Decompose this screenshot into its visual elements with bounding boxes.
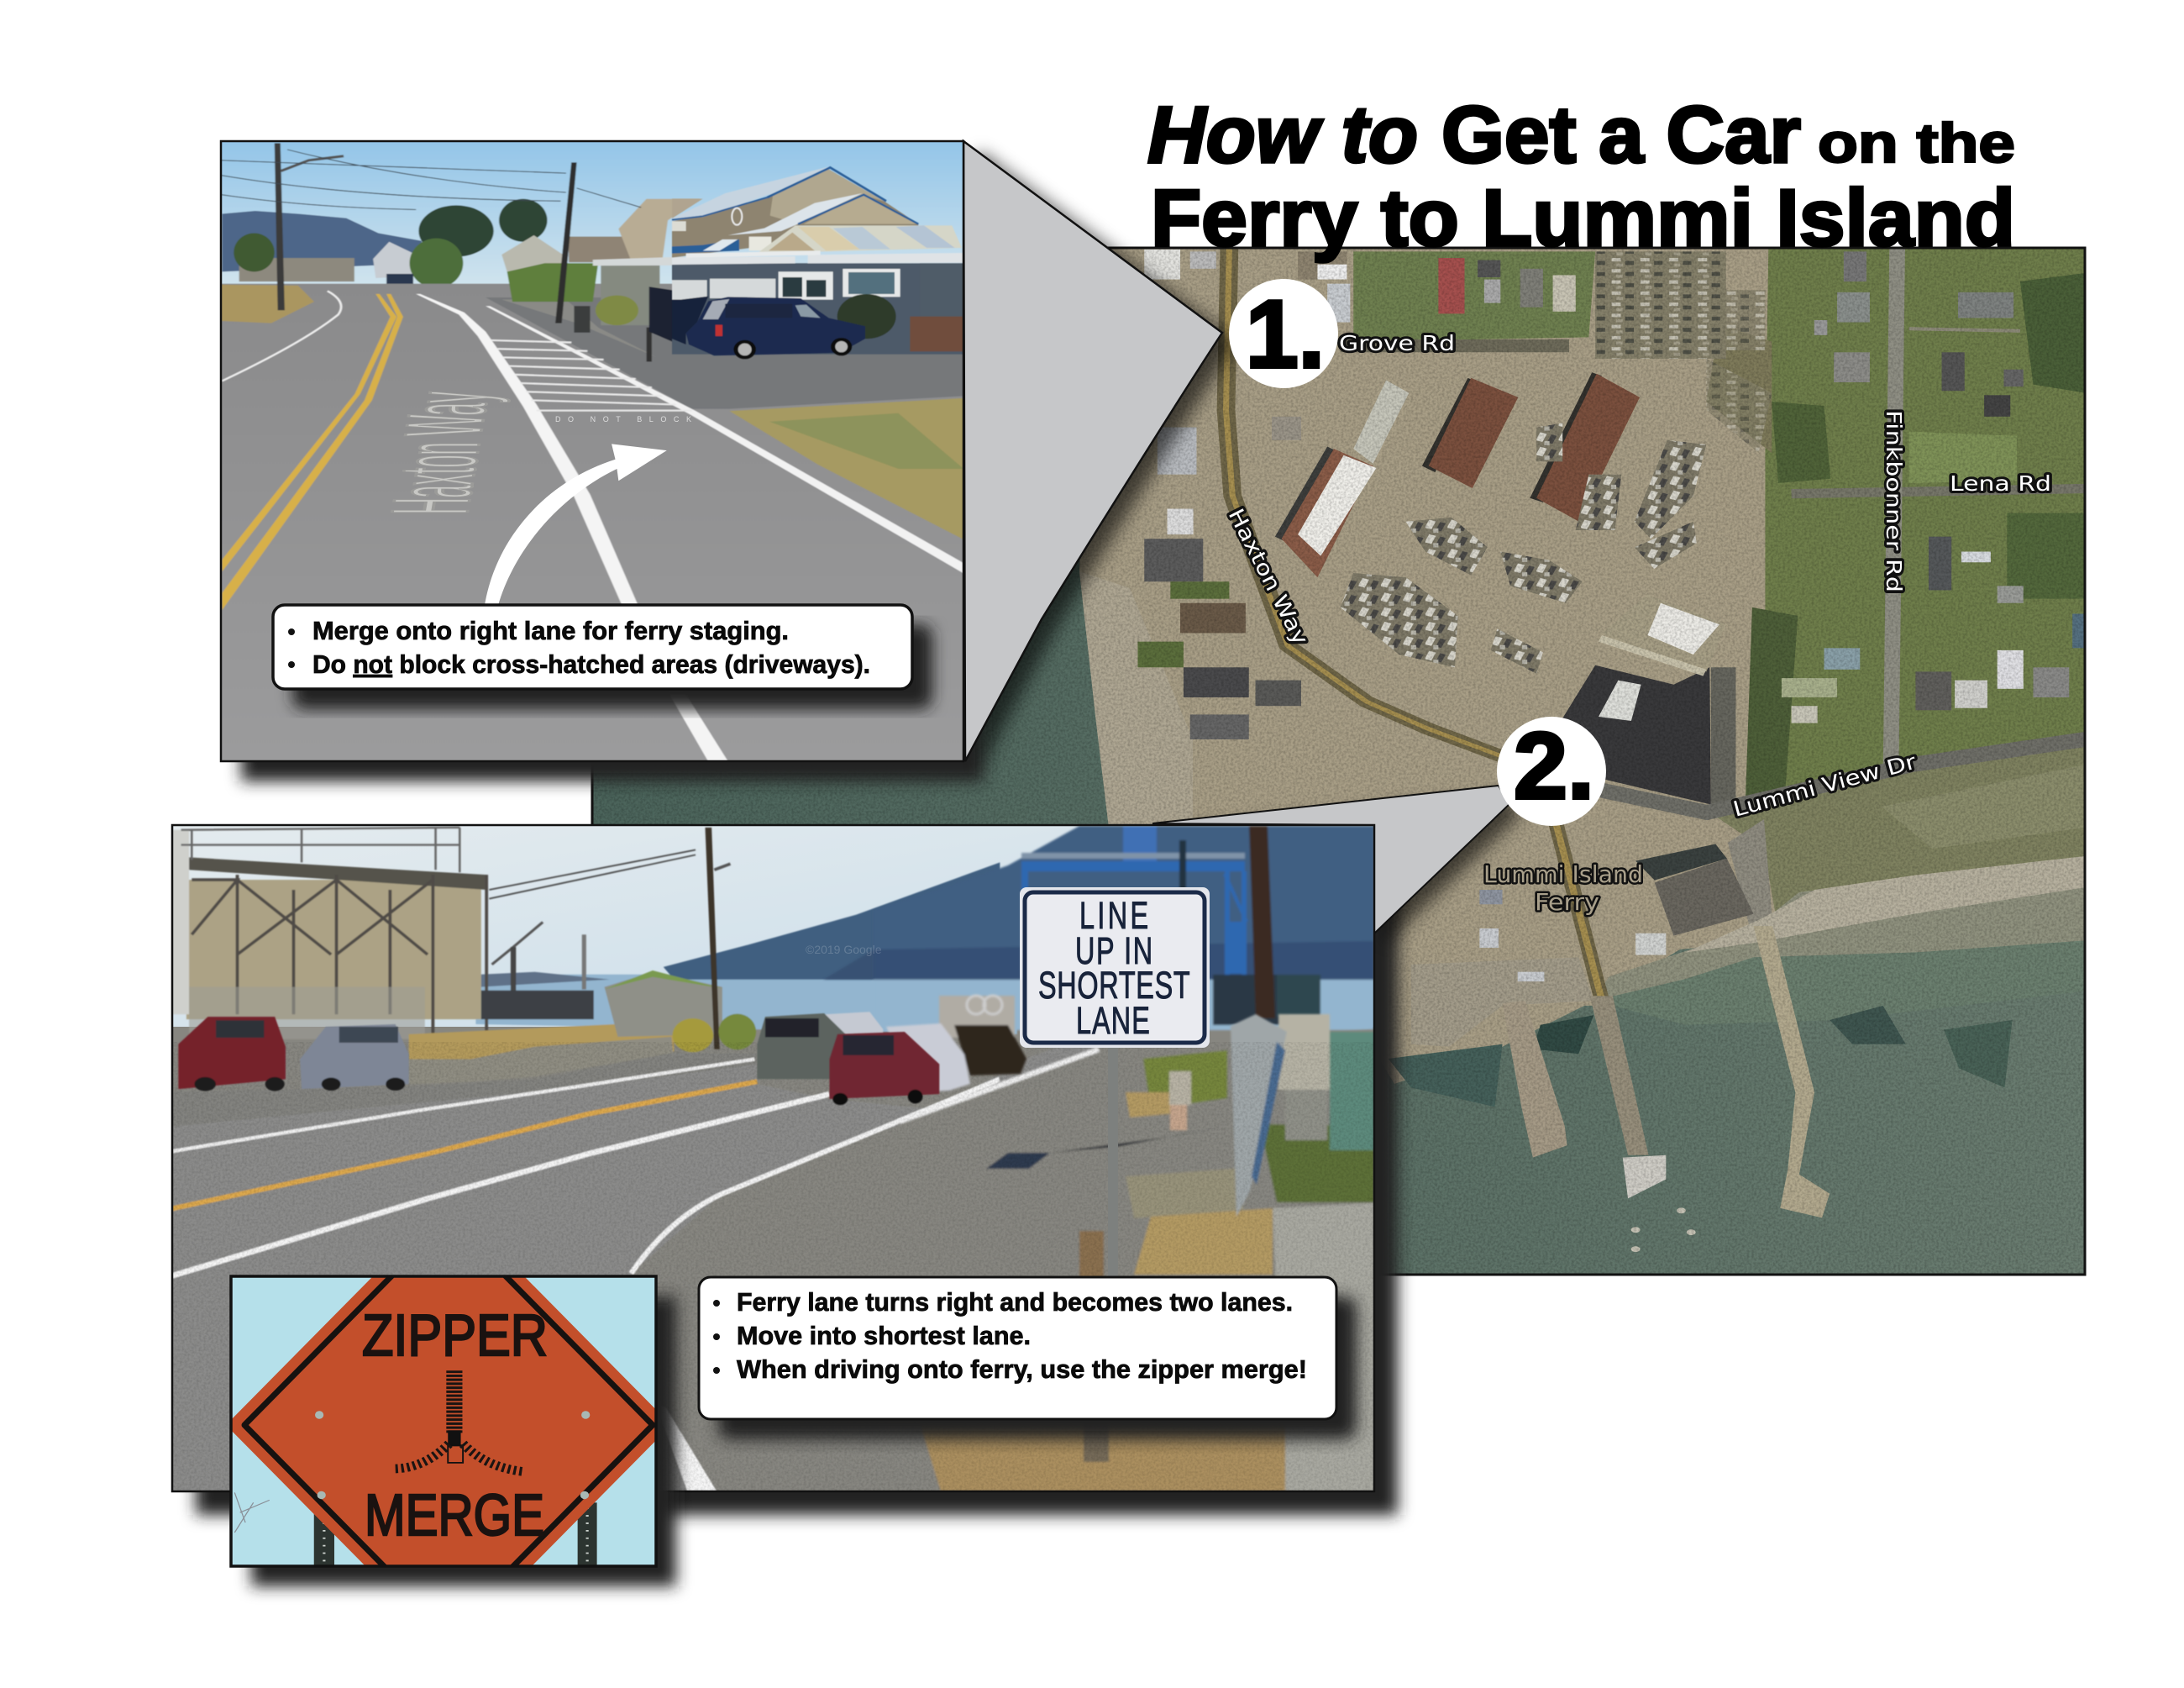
sign: line up in shortest lane: LANE <box>1076 1001 1150 1042</box>
warehouses <box>1422 378 1471 472</box>
callout: merge instructions: Do not block cross-hatched areas (driveways). <box>312 649 870 679</box>
painted road text: do not block: DO NOT BLOCK <box>555 415 691 423</box>
road markings <box>222 294 396 571</box>
callout: merge instructions: Merge onto right lane for ferry staging. <box>312 616 789 645</box>
callout: lane instructions: When driving onto ferry, use the zipper merge! <box>737 1354 1307 1384</box>
sign: line up in shortest lane: UP IN <box>1075 931 1152 972</box>
house, garage and parked cars <box>672 166 963 359</box>
label: Lummi Island Ferry <box>1483 860 1643 916</box>
label: Lummi View Dr: Lummi View Dr <box>1730 749 1919 822</box>
label: Grove Rd: Grove Rd <box>1339 331 1455 355</box>
title line 1 <box>1147 90 2015 180</box>
panel: street photo at ferry lane <box>172 825 1378 1491</box>
title line 1: Get a Car <box>1441 90 1801 180</box>
drop shadow of photo 2 <box>196 849 1398 1515</box>
arrow: merge right <box>485 444 667 606</box>
far shore: mountain, gantry, pole and water <box>823 826 1374 1030</box>
boat storage rows <box>1405 518 1488 576</box>
sign text: ZIPPER: ZIPPER <box>362 1302 548 1368</box>
sign post <box>1108 1042 1118 1286</box>
poles and wires <box>275 143 285 310</box>
marina office and lot <box>1550 665 1711 805</box>
right-side green area <box>1137 247 2086 805</box>
title line 1: How to <box>1147 90 1418 180</box>
label: Finkbonner Rd: Finkbonner Rd <box>1882 410 1906 592</box>
map labels <box>1224 331 2051 916</box>
sign: line up in shortest lane <box>1020 887 1210 1048</box>
red wagon <box>830 1032 939 1105</box>
title line 1: on the <box>1818 112 2015 174</box>
queued cars <box>178 1012 883 1091</box>
panel: street photo of Haxton Way <box>221 141 963 761</box>
label: Lummi Island Ferry: Lummi Island <box>1483 860 1643 888</box>
panel: street photo at ferry lane: ©2019 Google <box>806 943 882 956</box>
marker 1: 1. <box>1246 281 1325 388</box>
gravel speckle <box>172 1042 1374 1491</box>
callout wedge connecting photo 2 to point 2 <box>1152 786 1521 944</box>
title <box>1147 90 2015 263</box>
lower map: roads, beach and piers <box>1377 739 2086 1252</box>
truck with bikes and white car <box>886 996 1026 1092</box>
callout: lane instructions: Move into shortest lane. <box>737 1321 1031 1350</box>
painted road text: Haxton Way: Haxton Way <box>369 392 512 514</box>
sign: line up in shortest lane: SHORTEST <box>1038 965 1190 1007</box>
sign text: MERGE: MERGE <box>365 1482 544 1548</box>
title line 2: Ferry to Lummi Island <box>1151 173 2015 263</box>
panel: zipper merge sign photo <box>231 1206 676 1644</box>
road and driveway surfaces <box>221 284 963 761</box>
marker 2 <box>1497 713 1606 826</box>
ground: gravel, grass, concrete and roadside items <box>890 1014 1378 1491</box>
callout: lane instructions: Ferry lane turns right and becomes two lanes. <box>737 1287 1293 1317</box>
callout: lane instructions <box>699 1277 1357 1439</box>
drop shadow of photo 1 <box>241 161 984 781</box>
callout wedge connecting photo 1 to point 1 <box>963 141 1237 770</box>
marker 2: 2. <box>1514 713 1594 818</box>
label: Lummi Island Ferry: Ferry <box>1535 888 1599 916</box>
houses <box>1137 250 2086 739</box>
callout: merge instructions <box>273 605 932 709</box>
road <box>172 1057 1000 1491</box>
sign: line up in shortest lane: LINE <box>1079 896 1148 937</box>
panel: aerial map of ferry approach <box>592 247 2086 1275</box>
label: Lena Rd: Lena Rd <box>1950 471 2051 496</box>
label: Haxton Way: Haxton Way <box>1224 505 1313 649</box>
